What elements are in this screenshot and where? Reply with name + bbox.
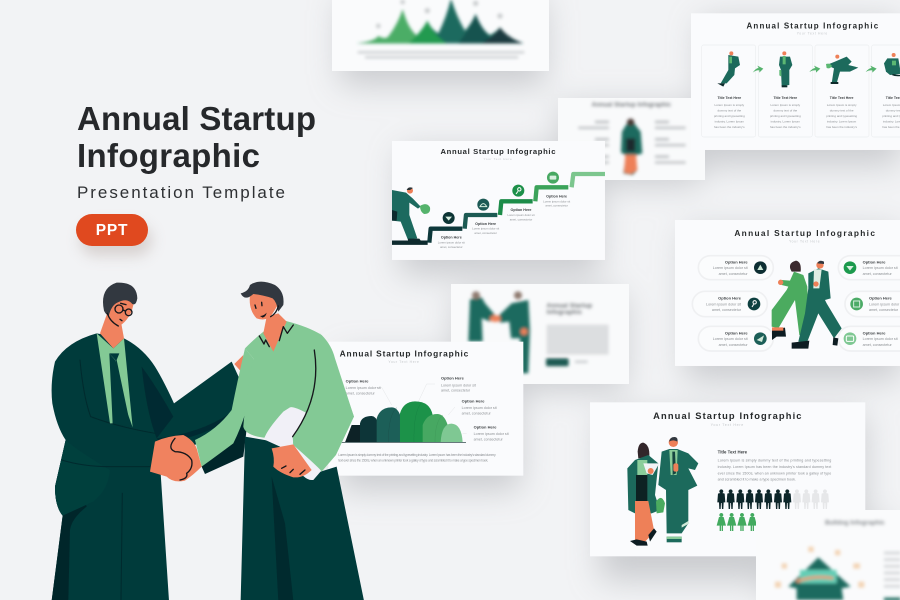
- body text: industry. Lorem Ipsum has been the industry's standard dummy text: [718, 465, 831, 469]
- card text: Lorem Ipsum is simply: [714, 103, 745, 107]
- leader lines: [375, 384, 467, 433]
- card text: industry. Lorem Ipsum: [827, 120, 857, 124]
- step labels: Option Here: [511, 208, 531, 212]
- slide title: Annual Startup Infographic: [653, 411, 801, 421]
- slide: stair steps: [392, 141, 605, 260]
- hill labels: Lorem ipsum dolor sit: [474, 432, 509, 436]
- slide: blurred handshake: Annual Startup: [547, 303, 592, 309]
- slide: four figures: Your Text Here: [797, 32, 828, 36]
- slide: blurred house: [756, 510, 900, 600]
- card text: has been the industry's: [826, 125, 857, 129]
- step icons: [443, 172, 559, 224]
- step labels: amet, consectetur: [474, 231, 497, 235]
- body text: Lorem Ipsum is simply dummy text of the printing and typesetting: [718, 459, 831, 463]
- illustration: handshake: [52, 282, 364, 600]
- option text: Option Here: [869, 295, 893, 300]
- slide: options with couple: Your Text Here: [789, 240, 820, 244]
- card text: Title Text Here: [830, 96, 854, 100]
- option text: Lorem ipsum dolor sit: [713, 266, 748, 270]
- slide: blurred handshake: [451, 284, 629, 384]
- hill labels: Lorem ipsum dolor sit: [441, 383, 476, 387]
- badge: PPT: PPT: [96, 222, 128, 239]
- slide title: Annual Startup Infographic: [746, 21, 879, 30]
- hill labels: Option Here: [474, 424, 497, 429]
- layered hills: [340, 401, 466, 442]
- couple illustration: [627, 437, 698, 546]
- option icons: [748, 261, 863, 345]
- slide title: Annual Startup Infographic: [734, 228, 875, 238]
- heading: Annual Startup Infographic: [77, 100, 316, 174]
- hill labels: amet, consectetur: [474, 438, 503, 442]
- figures: [721, 55, 900, 86]
- slide: people chart: [590, 402, 865, 556]
- option text: amet, consectetur: [712, 308, 742, 312]
- card text: Lorem Ipsum is simply: [827, 103, 857, 107]
- option text: amet, consectetur: [869, 308, 899, 312]
- slide: options with couple: [675, 220, 900, 366]
- step labels: Lorem ipsum dolor sit: [507, 213, 535, 217]
- badge: PPT: [76, 214, 152, 256]
- option text: amet, consectetur: [863, 343, 892, 347]
- option text: Lorem ipsum dolor sit: [863, 337, 898, 341]
- card text: industry. Lorem Ipsum: [715, 120, 744, 124]
- step labels: Lorem ipsum dolor sit: [438, 240, 465, 244]
- slide: mountain layers: [328, 342, 523, 476]
- man with notebook: [195, 282, 364, 600]
- option text: Option Here: [863, 259, 886, 264]
- slide: stair steps: Your Text Here: [484, 157, 512, 161]
- arrows: [753, 66, 877, 73]
- slide: blurred house: Bulldog Infographic: [825, 519, 885, 526]
- option text: Lorem ipsum dolor sit: [706, 302, 741, 306]
- option pills: [692, 256, 900, 351]
- hill labels: [346, 375, 509, 442]
- slide: blurred centre figure: [558, 98, 705, 180]
- pictogram: women: [717, 513, 757, 531]
- subheading: Presentation Template: [77, 183, 285, 202]
- option text: Option Here: [725, 259, 748, 264]
- hill labels: Option Here: [346, 379, 369, 384]
- step labels: amet, consectetur: [510, 217, 532, 221]
- card text: [714, 96, 900, 129]
- body text: Title Text Here: [718, 450, 748, 455]
- option text: [706, 259, 900, 347]
- option text: Option Here: [863, 330, 886, 335]
- card text: Title Text Here: [773, 96, 797, 100]
- hill labels: amet, consectetur: [346, 392, 376, 396]
- step labels: Option Here: [475, 222, 496, 226]
- slide: blurred centre figure: Annual Startup Infographic: [592, 103, 672, 109]
- card text: has been the industry's: [714, 125, 745, 129]
- climbing man: [392, 187, 430, 241]
- hill labels: Lorem ipsum dolor sit: [346, 386, 381, 390]
- slide: blurred mountain chart: [332, 0, 549, 71]
- option text: amet, consectetur: [863, 272, 892, 276]
- step labels: Lorem ipsum dolor sit: [543, 199, 570, 203]
- step labels: amet, consectetur: [440, 245, 463, 249]
- slide: mountain layers: Your Text Here: [388, 360, 420, 364]
- stair path: [392, 174, 605, 243]
- option text: amet, consectetur: [719, 343, 748, 347]
- body text: [718, 450, 831, 482]
- body text: ever since the 1500s, when an unknown printer took a galley of type: [718, 471, 831, 475]
- body text: and scrambled it to make a type specimen book.: [718, 478, 796, 482]
- caption: [338, 453, 496, 463]
- step labels: amet, consectetur: [545, 204, 568, 208]
- heading: Annual Startup Infographic: Annual Startup: [77, 100, 316, 137]
- slide: four figures: [691, 13, 900, 150]
- card text: dummy text of the: [717, 108, 742, 112]
- card text: Title Text Here: [717, 96, 741, 100]
- pictogram: men: [717, 489, 829, 509]
- hill labels: amet, consectetur: [441, 389, 471, 393]
- card text: industry. Lorem Ipsum: [771, 120, 800, 124]
- hill labels: Option Here: [441, 375, 465, 380]
- caption: Lorem Ipsum is simply dummy text of the printing and typesetting industry. Lorem Ipsum has been the industry's standard dummy: [338, 453, 496, 457]
- slide: blurred handshake: Infographic: [547, 310, 583, 316]
- hill labels: amet, consectetur: [462, 411, 491, 415]
- card text: has been the industry's: [770, 125, 801, 129]
- card text: printing and typesetting: [826, 114, 857, 118]
- cards: [702, 45, 900, 137]
- couple illustration: [772, 261, 842, 349]
- slide shadows: [340, 0, 900, 600]
- slide title: Annual Startup Infographic: [440, 147, 556, 156]
- option text: amet, consectetur: [719, 272, 748, 276]
- slide: people chart: Your Text Here: [711, 423, 744, 427]
- slide title: Annual Startup Infographic: [340, 348, 469, 358]
- card text: printing and typesetting: [770, 114, 801, 118]
- step labels: Lorem ipsum dolor sit: [472, 227, 499, 231]
- option text: Option Here: [718, 295, 742, 300]
- step labels: [438, 194, 570, 249]
- card text: dummy text of the: [830, 108, 854, 112]
- card text: Lorem Ipsum is simply: [770, 103, 801, 107]
- option text: Option Here: [725, 330, 748, 335]
- card text: dummy text of the: [773, 108, 798, 112]
- card text: printing and typesetting: [714, 114, 745, 118]
- option text: Lorem ipsum dolor sit: [713, 337, 748, 341]
- clasped hands: [150, 435, 202, 481]
- step labels: Option Here: [546, 194, 567, 198]
- option text: Lorem ipsum dolor sit: [863, 266, 898, 270]
- heading: Annual Startup Infographic: Infographic: [77, 137, 260, 174]
- man with glasses: [52, 283, 243, 600]
- hill labels: Lorem ipsum dolor sit: [462, 406, 497, 410]
- step labels: Option Here: [441, 235, 462, 239]
- hill labels: Option Here: [462, 398, 485, 403]
- caption: text ever since the 1500s, when an unknown printer took a galley of type and scrambled it to make a type specimen book.: [338, 459, 488, 463]
